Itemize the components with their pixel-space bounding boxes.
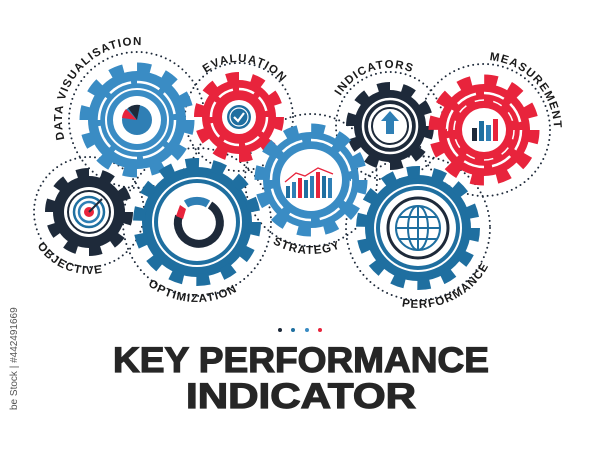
label: objective: OBJECTIVE: [38, 242, 102, 274]
gear: performance: [362, 172, 474, 284]
icon: donut chart: [176, 201, 220, 244]
icon: target: [74, 197, 104, 227]
icon: pie chart: [122, 105, 152, 135]
title: [113, 341, 489, 416]
icon: globe: [396, 206, 440, 250]
icon: line + bar chart: [285, 168, 333, 198]
gear: measurement: [434, 80, 534, 180]
gear: evaluation: [199, 77, 279, 157]
title: KEY PERFORMANCE: [113, 341, 489, 380]
gear: strategy: [260, 129, 362, 231]
label: strategy: STRATEGY: [274, 238, 338, 254]
watermark text: be Stock | #442491669: [9, 307, 20, 410]
label: evaluation: EVALUATION: [202, 54, 287, 82]
label: optimization: OPTIMIZATION: [149, 280, 236, 302]
gear: optimization: [139, 164, 255, 280]
label: measurement: MEASUREMENT: [490, 52, 562, 128]
decorative dots: [278, 328, 322, 332]
icon: check: [227, 105, 251, 129]
gear: data visualisation: [85, 68, 189, 172]
label: indicators: INDICATORS: [334, 60, 413, 96]
dotted rings: [34, 52, 550, 300]
label: performance: PERFORMANCE: [402, 262, 488, 308]
title: INDICATOR: [186, 377, 416, 416]
icon: bar chart: [472, 119, 498, 141]
label: data visualisation: DATA VISUALISATION: [54, 37, 141, 140]
gear: objective: [50, 173, 128, 251]
icon: up arrow: [381, 111, 399, 134]
gear: indicators: [351, 87, 429, 165]
